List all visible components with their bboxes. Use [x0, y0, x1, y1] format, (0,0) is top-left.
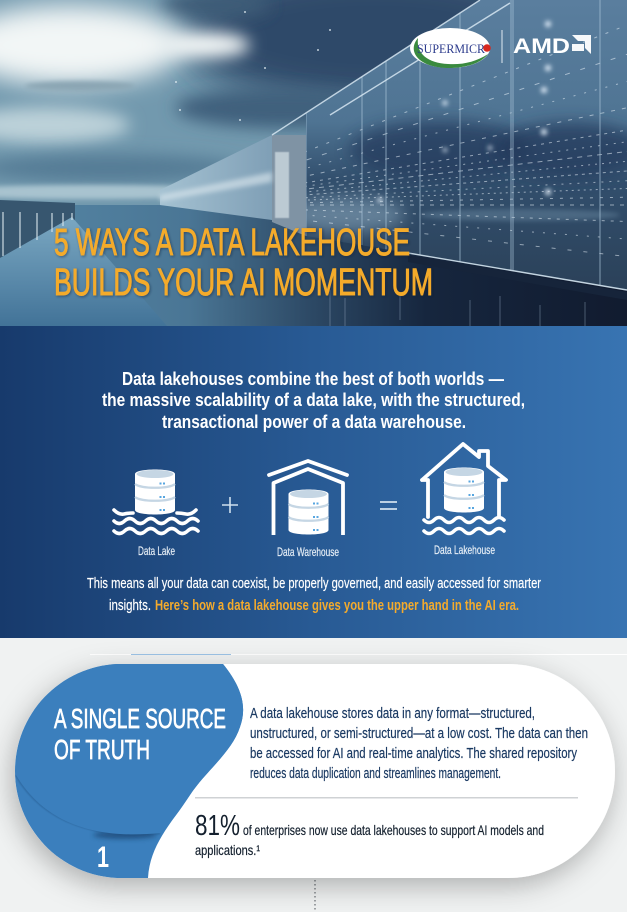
- explanatory paragraph: insights.: [109, 597, 151, 614]
- label: data lakehouse: Data Lakehouse: [434, 543, 495, 557]
- step number: 1: [97, 841, 109, 874]
- heading lobe: [16, 664, 243, 834]
- equals sign: [380, 502, 397, 509]
- Supermicro logo: SUPERMICR: [417, 41, 485, 56]
- panel: lakehouse intro: [0, 326, 627, 638]
- card heading: [54, 703, 226, 765]
- label: data warehouse: Data Warehouse: [277, 545, 339, 559]
- stat: 81 percent: 81%: [195, 810, 240, 842]
- hero photo: data centre on a lake: [0, 0, 627, 326]
- icon: data lakehouse: [422, 444, 506, 534]
- dotted connector: [314, 880, 316, 912]
- icon: data lake: [114, 470, 198, 534]
- intro statement: Data lakehouses combine the best of both worlds —: [122, 369, 504, 389]
- body text: reduces data duplication and streamlines management.: [250, 765, 501, 782]
- body text: A data lakehouse stores data in any format—structured,: [250, 705, 535, 722]
- title: 5 WAYS A DATA LAKEHOUSE: [54, 222, 410, 264]
- title: [54, 228, 432, 298]
- icon: data warehouse: [269, 461, 347, 535]
- title: BUILDS YOUR AI MOMENTUM: [54, 262, 433, 304]
- railing and walkway: [0, 200, 75, 258]
- water reflections: [330, 290, 585, 326]
- card heading: A SINGLE SOURCE: [54, 703, 226, 734]
- card heading: OF TRUTH: [54, 734, 150, 765]
- side wing of the building: [160, 135, 272, 220]
- main glass facade: [272, 0, 627, 290]
- plus sign: [222, 497, 238, 513]
- water: [75, 205, 627, 326]
- explanatory paragraph: Here’s how a data lakehouse gives you the upper hand in the AI era.: [155, 597, 519, 614]
- intro statement: transactional power of a data warehouse.: [162, 412, 466, 432]
- shadow under heading lobe: [16, 775, 160, 839]
- intro statement: the massive scalability of a data lake, with the structured,: [102, 390, 525, 410]
- stat: 81 percent: applications.¹: [195, 842, 260, 858]
- logo divider: [502, 30, 503, 63]
- label: data lake: Data Lake: [138, 544, 175, 558]
- AMD logo: AMD: [513, 35, 570, 58]
- AMD logo: [514, 35, 591, 54]
- explanatory paragraph: [87, 575, 541, 614]
- Supermicro logo: [410, 28, 491, 68]
- top rule with blue accent: [90, 654, 627, 655]
- divider: [195, 797, 578, 798]
- panel: step 1 card: [15, 664, 615, 878]
- stat: 81 percent: [195, 810, 544, 858]
- blue step tab: [15, 664, 243, 878]
- intro statement: [102, 369, 525, 432]
- body text: [250, 705, 588, 782]
